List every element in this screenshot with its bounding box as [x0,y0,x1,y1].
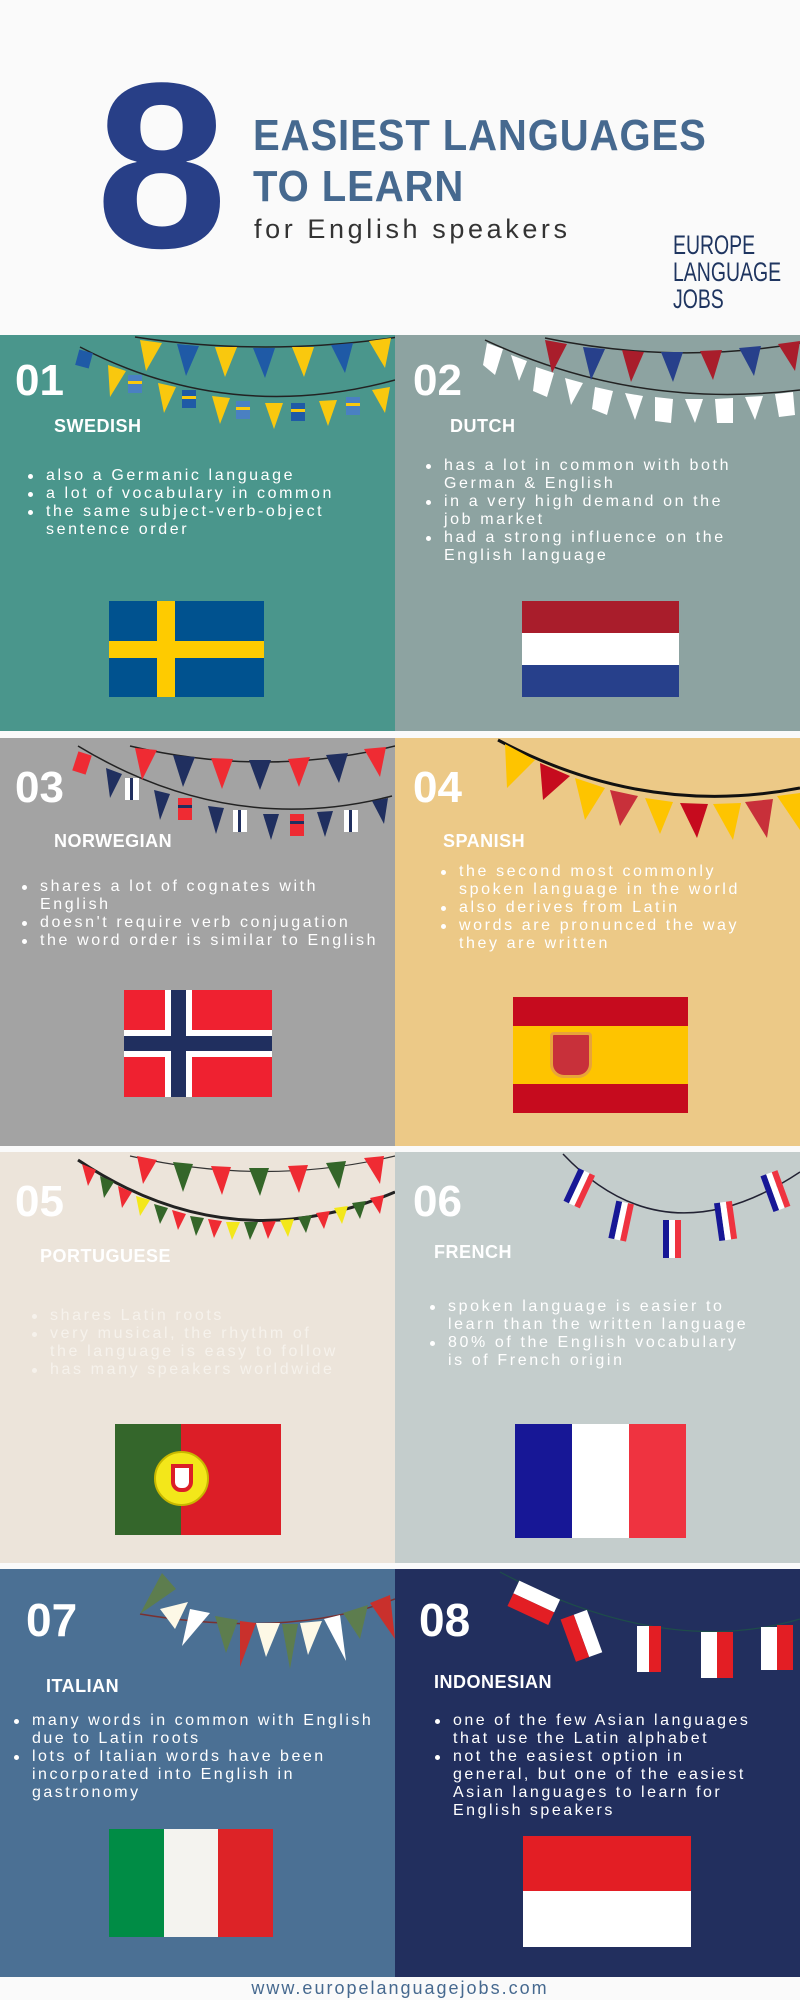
bullet list: norwegian [22,878,378,949]
panel: 06 french [395,1152,800,1563]
bunting: indonesian [500,1572,800,1678]
bullet list: dutch: English language [444,547,608,564]
bunting: swedish [75,336,395,429]
header [0,0,800,335]
bullet list: swedish: also a Germanic language [46,467,295,484]
heading: portuguese: PORTUGUESE [40,1246,171,1266]
bullet list: portuguese: shares Latin roots [50,1307,224,1324]
flag: spain [513,997,688,1113]
bullet list: indonesian: not the easiest option in [453,1748,685,1765]
panel: 08 indonesian [395,1569,800,1977]
flag: portugal [115,1424,281,1535]
bullet list: spanish: words are pronunced the way [459,917,739,934]
panel: 07 italian [0,1569,395,1977]
number 04: 04 [413,763,462,812]
bullet list: norwegian: shares a lot of cognates with [40,878,318,895]
footer url: www.europelanguagejobs.com [251,1978,549,1998]
panel: 03 norwegian [0,738,395,1146]
bullet list: italian: many words in common with English [32,1712,373,1729]
bunting: portuguese [77,1155,395,1240]
panel: 01 swedish [0,335,395,731]
bullet list: portuguese [32,1307,338,1378]
flag: sweden [109,601,264,697]
bullet list: spanish: spoken language in the world [459,881,740,898]
number 06: 06 [413,1177,462,1226]
bullet list: norwegian: English [40,896,111,913]
bullet list: italian: lots of Italian words have been [32,1748,326,1765]
bullet list: spanish: also derives from Latin [459,899,680,916]
logo [673,230,781,314]
panel: 02 dutch [395,335,800,731]
heading: indonesian: INDONESIAN [434,1672,552,1692]
bullet list: portuguese: the language is easy to follow [50,1343,338,1360]
icon: coat of arms [550,1032,592,1078]
logo: LANGUAGE [673,257,781,287]
number 05: 05 [15,1177,64,1226]
title: TO LEARN [253,162,464,211]
number 01: 01 [15,356,64,405]
bunting: spanish [497,738,800,840]
bullet list: portuguese: has many speakers worldwide [50,1361,335,1378]
bullet list: indonesian: English speakers [453,1802,615,1819]
bullet list: italian: incorporated into English in [32,1766,295,1783]
bunting: french [562,1154,800,1258]
bullet list: dutch: had a strong influence on the [444,529,726,546]
panel: 05 portuguese [0,1152,395,1563]
bullet list: indonesian: one of the few Asian languages [453,1712,750,1729]
flag: indonesia [523,1836,691,1947]
flag: france [515,1424,686,1538]
number 08: 08 [419,1594,470,1646]
bullet list: spanish: they are written [459,935,610,952]
heading: italian: ITALIAN [46,1676,119,1696]
subtitle: for English speakers [254,214,571,244]
bullet list: french: learn than the written language [448,1316,748,1333]
bullet list: italian: gastronomy [32,1784,141,1801]
bullet list: dutch: in a very high demand on the [444,493,723,510]
flag: italy [109,1829,273,1937]
bullet list: spanish: the second most commonly [459,863,716,880]
number 02: 02 [413,356,462,405]
bullet list: italian [14,1712,373,1801]
bullet list: portuguese: very musical, the rhythm of [50,1325,311,1342]
logo: JOBS [673,284,724,314]
bullet list: dutch [426,457,731,564]
title: EASIEST LANGUAGES [253,111,707,160]
icon: armillary sphere [154,1451,209,1506]
bullet list: norwegian: the word order is similar to English [40,932,378,949]
logo: EUROPE [673,230,755,260]
bullet list: swedish: the same subject-verb-object [46,503,324,520]
bullet list: swedish [28,467,334,538]
heading: norwegian: NORWEGIAN [54,831,172,851]
number 03: 03 [15,763,64,812]
flag: netherlands [522,601,679,697]
bullet list: indonesian: Asian languages to learn for [453,1784,722,1801]
big number 8: 8 [96,34,223,298]
bullet list: swedish: sentence order [46,521,189,538]
bullet list: dutch: job market [444,511,545,528]
bullet list: french: spoken language is easier to [448,1298,724,1315]
bullet list: french: is of French origin [448,1352,625,1369]
bullet list: french [430,1298,748,1369]
heading: french: FRENCH [434,1242,512,1262]
title [253,111,707,211]
number 07: 07 [26,1594,77,1646]
bullet list: indonesian: that use the Latin alphabet [453,1730,709,1747]
bullet list: italian: due to Latin roots [32,1730,201,1747]
bullet list: dutch: German & English [444,475,615,492]
heading: spanish: SPANISH [443,831,525,851]
bullet list: dutch: has a lot in common with both [444,457,731,474]
bullet list: swedish: a lot of vocabulary in common [46,485,334,502]
bunting: italian [140,1573,395,1668]
bullet list: indonesian: general, but one of the easiest [453,1766,746,1783]
bullet list: indonesian [435,1712,750,1819]
heading: swedish: SWEDISH [54,416,142,436]
bunting: norwegian [72,745,395,840]
flag: norway [124,990,272,1097]
bullet list: french: 80% of the English vocabulary [448,1334,739,1351]
bullet list: spanish [441,863,740,952]
heading: dutch: DUTCH [450,416,516,436]
panel: 04 spanish [395,738,800,1146]
bunting: dutch [483,337,800,423]
bullet list: norwegian: doesn't require verb conjugation [40,914,350,931]
